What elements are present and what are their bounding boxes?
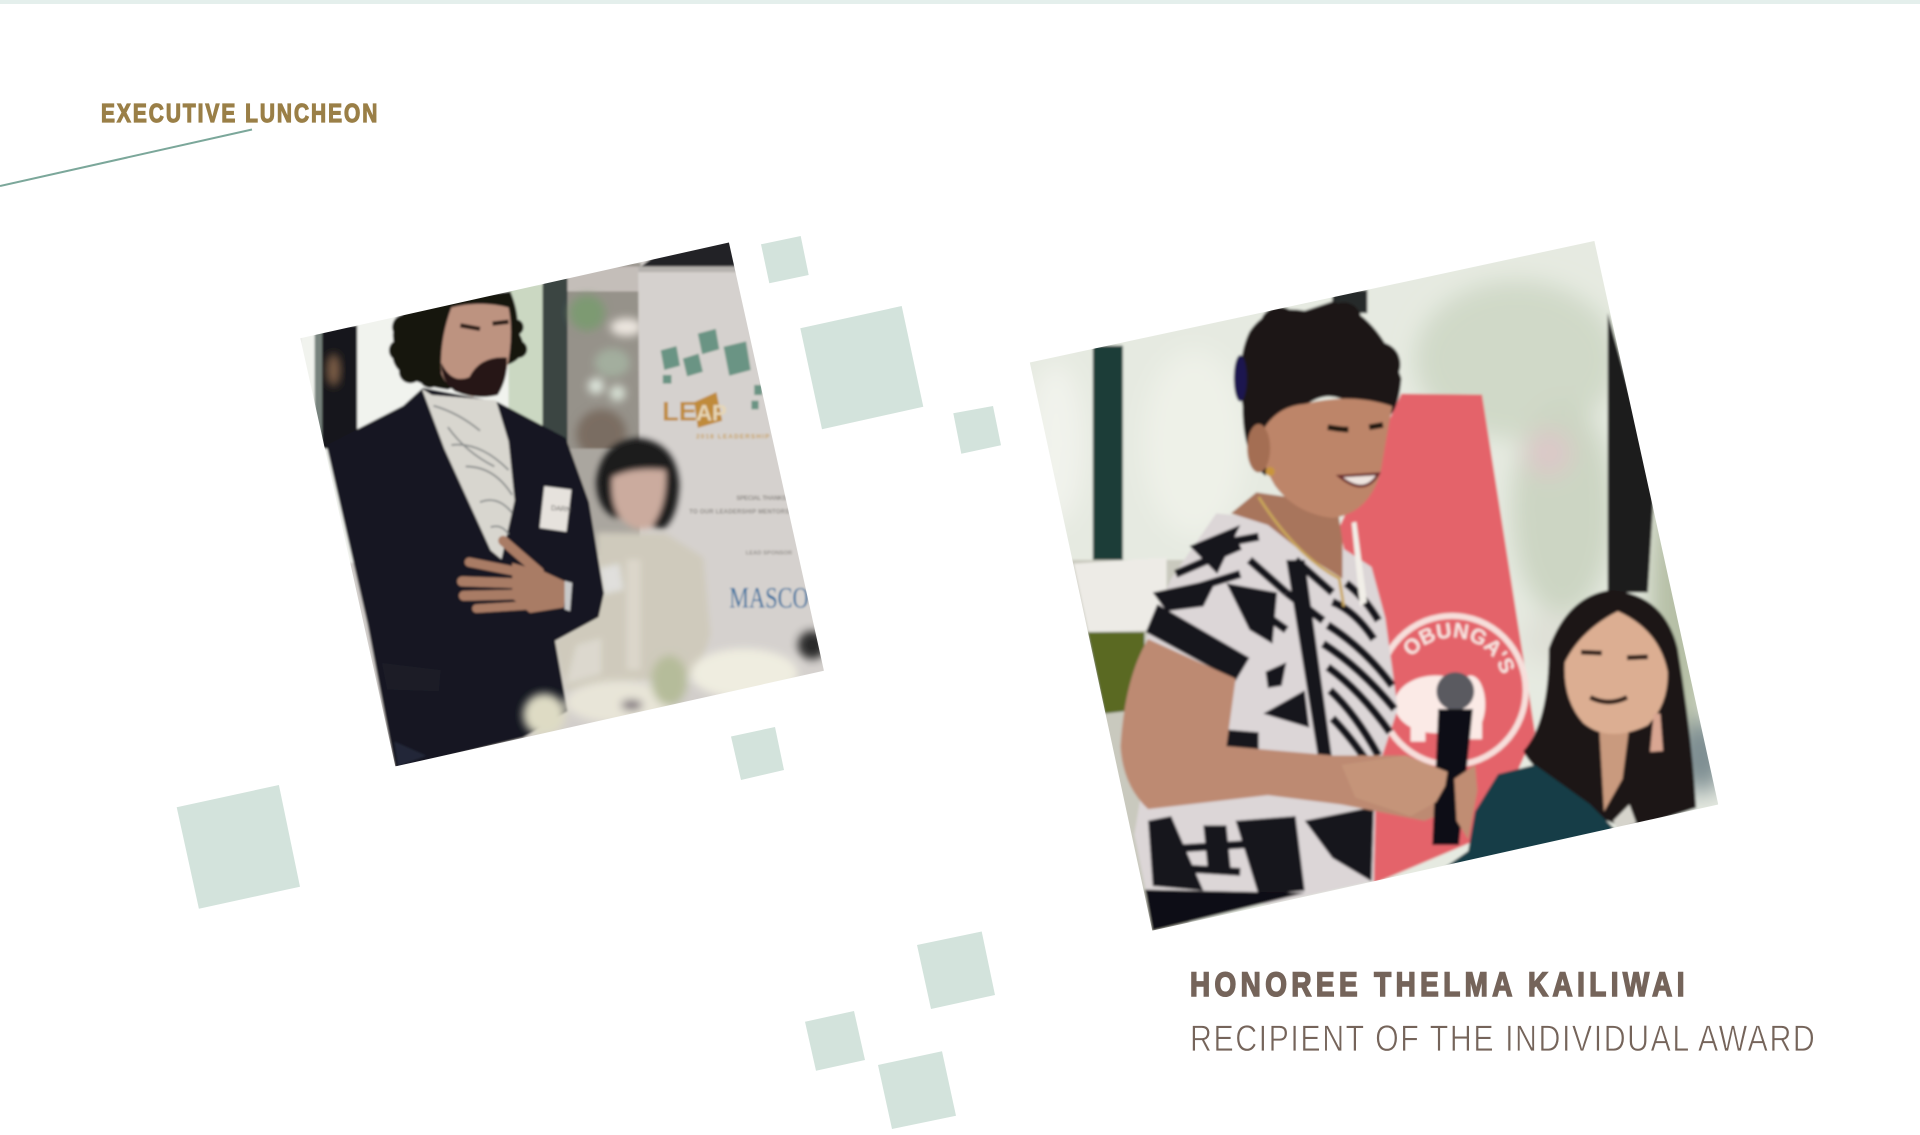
banner sponsor text: LEAD SPONSOR	[746, 550, 792, 556]
earring	[1266, 467, 1275, 476]
photo background	[300, 260, 724, 766]
arm	[1121, 639, 1475, 821]
teal top	[1446, 764, 1615, 865]
jacket	[326, 388, 604, 770]
right fingers on mic	[1454, 765, 1477, 839]
banner wordmark: LE	[662, 396, 697, 427]
sponsor banner	[637, 264, 808, 609]
red banner	[1338, 392, 1538, 882]
hair	[1240, 301, 1401, 476]
banner thanks text: SPECIAL THANKS	[736, 496, 786, 502]
blouse hem	[1145, 890, 1305, 931]
microphone	[1432, 672, 1474, 845]
photo: man at podium with banner	[300, 242, 824, 766]
blouse	[1134, 513, 1398, 905]
hair clip	[1234, 355, 1247, 402]
top accent bar	[0, 0, 1920, 4]
ear	[1247, 424, 1270, 472]
honoree caption	[1190, 965, 1815, 1060]
name on tag: DARN	[551, 504, 571, 514]
name tag ribbon	[1352, 522, 1367, 607]
blouse zebra stripes	[1167, 537, 1395, 872]
hand holding microphone	[1342, 756, 1447, 816]
section heading: EXECUTIVE LUNCHEON	[101, 99, 377, 127]
decorative squares	[177, 236, 1001, 1129]
honoree name: HONOREE THELMA KAILIWAI	[1190, 965, 1684, 1004]
banner wordmark	[662, 392, 727, 428]
necklace	[1259, 497, 1344, 607]
glass jar with green drink	[1074, 558, 1167, 714]
name tag	[540, 486, 571, 532]
banner emblem ring	[1378, 616, 1526, 765]
shirt	[422, 389, 515, 559]
hand on chest	[462, 541, 567, 613]
foreground flowers	[523, 631, 826, 736]
banner sponsor logo: MASCO	[729, 581, 809, 614]
seated woman with long hair	[1438, 590, 1696, 872]
photo background	[1030, 241, 1718, 930]
curly hair	[389, 291, 527, 390]
eyes and brows	[1328, 425, 1383, 430]
neck	[1599, 725, 1629, 811]
honoree in patterned blouse	[1121, 301, 1477, 931]
beard	[441, 357, 507, 397]
watch	[565, 581, 572, 611]
photo: honoree Thelma Kailiwai speaking	[1030, 241, 1718, 930]
long hair	[1523, 590, 1696, 830]
woman in background	[553, 438, 710, 691]
photo top dark wedge	[640, 242, 734, 268]
eyes and smile	[1581, 652, 1648, 702]
heading diagonal rule	[0, 130, 252, 186]
banner pig emblem	[1395, 675, 1485, 742]
award line: RECIPIENT OF THE INDIVIDUAL AWARD	[1190, 1018, 1815, 1060]
man in dark jacket	[326, 291, 604, 770]
white inner top	[1613, 804, 1636, 830]
banner wordmark: AP	[696, 401, 727, 426]
face	[441, 304, 511, 397]
neck and chest	[1231, 492, 1342, 579]
banner mentors text: TO OUR LEADERSHIP MENTORS	[689, 510, 789, 516]
face	[1565, 611, 1668, 734]
banner emblem lettering: OBUNGA'S	[1402, 621, 1516, 675]
earring	[1650, 714, 1663, 752]
banner small text: 2018 LEADERSHIP	[696, 434, 770, 441]
face	[1259, 399, 1392, 518]
smile	[1339, 474, 1378, 486]
blouse black pattern	[1146, 525, 1374, 895]
eyes	[460, 322, 509, 329]
banner logo squares	[661, 329, 762, 409]
